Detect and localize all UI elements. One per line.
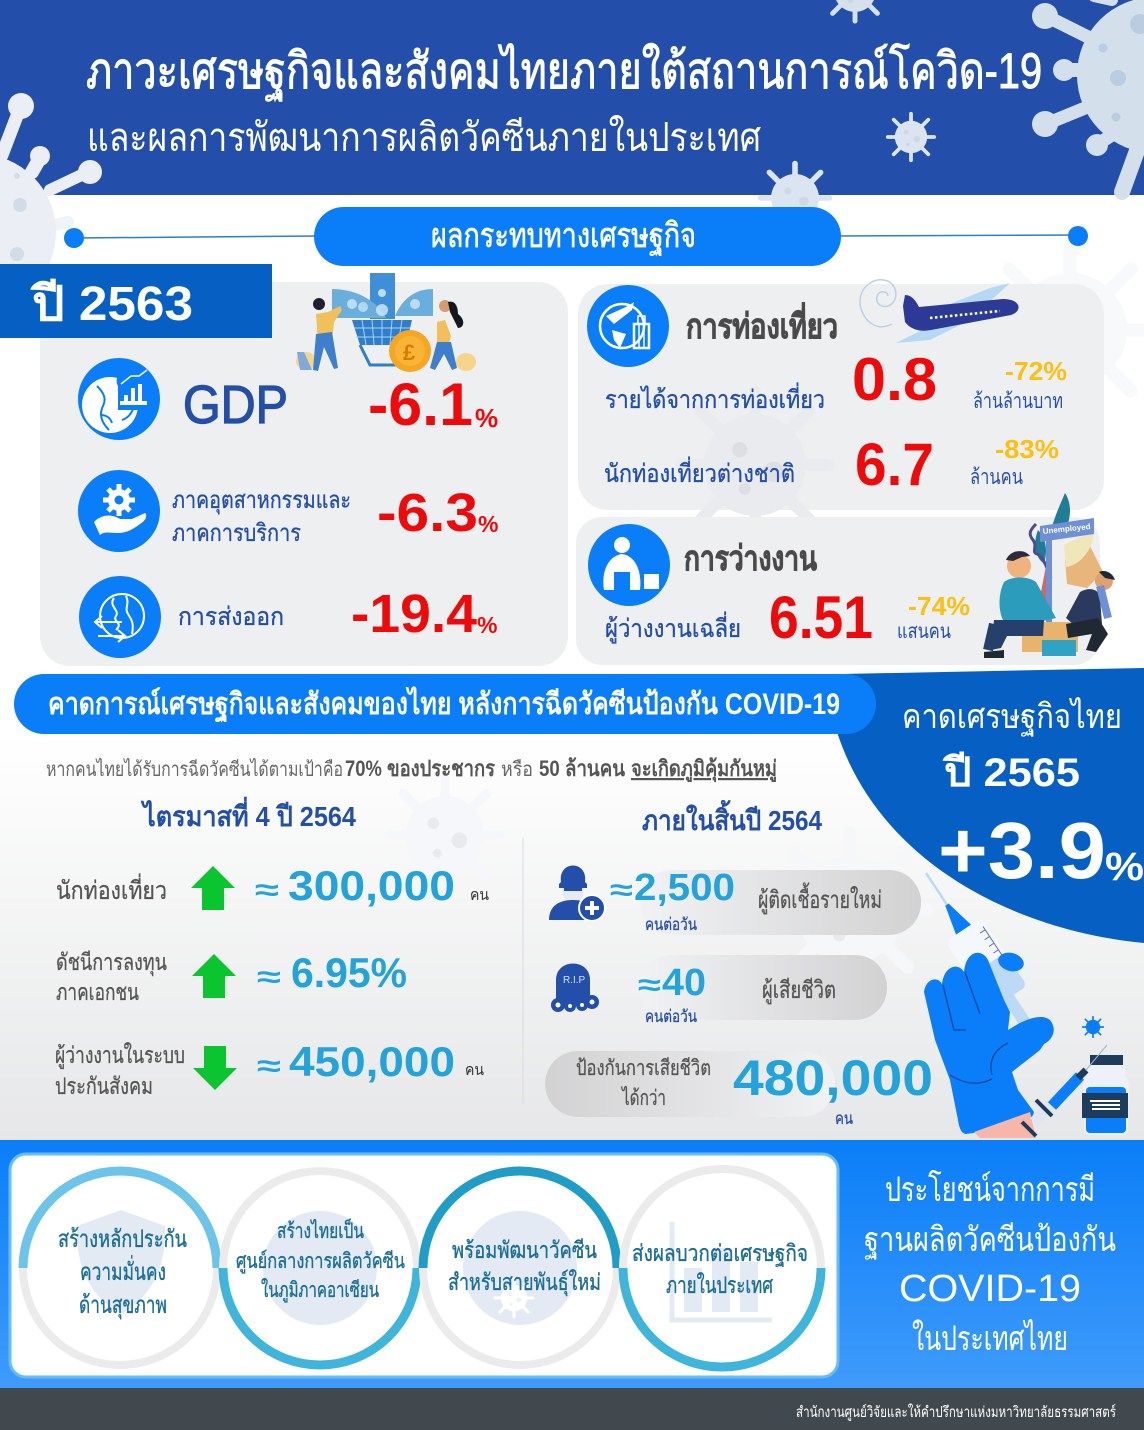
large virus right bbox=[1032, 0, 1144, 192]
syringe bbox=[908, 861, 1056, 1054]
forecast year: ปี 2565 bbox=[942, 751, 1080, 795]
tourism heading: การท่องเที่ยว bbox=[686, 302, 838, 346]
icon: unemployed person bbox=[588, 524, 670, 606]
income unit: ล้านล้านบาท bbox=[973, 390, 1063, 413]
industry percent: % bbox=[478, 511, 498, 537]
export percent: % bbox=[477, 612, 497, 638]
benefit ring 4: ภายในประเทศ bbox=[666, 1272, 773, 1298]
forecast blue corner bbox=[838, 668, 1144, 943]
forearm bbox=[974, 1112, 1036, 1138]
forecast value: +3.9 bbox=[938, 806, 1106, 895]
icon: shopping cart illustration bbox=[296, 273, 476, 372]
approximately sign: ≈ bbox=[255, 874, 279, 907]
benefit ring 4 bbox=[623, 1169, 821, 1367]
value: 450,000 bbox=[289, 1038, 455, 1085]
benefit ring 1 bbox=[23, 1171, 217, 1365]
industry label: ภาคการบริการ bbox=[172, 520, 301, 547]
tourism income label: รายได้จากการท่องเที่ยว bbox=[605, 382, 825, 414]
forecast percent: % bbox=[1105, 845, 1144, 889]
icon: GDP globe bbox=[78, 358, 160, 440]
benefits heading: ในประเทศไทย bbox=[912, 1319, 1068, 1358]
large virus left bbox=[0, 93, 102, 310]
year tag 2563 bbox=[0, 264, 272, 338]
GDP label: GDP bbox=[183, 375, 288, 435]
illustration: airplane bbox=[860, 280, 1019, 343]
intro sentence bbox=[46, 756, 777, 783]
metric: tourists: นักท่องเที่ยว bbox=[56, 873, 167, 905]
tourists unit: ล้านคน bbox=[970, 466, 1023, 489]
unemployment heading: การว่างงาน bbox=[684, 540, 817, 578]
GDP percent: % bbox=[475, 403, 498, 433]
unemployed value: 6.51 bbox=[769, 584, 873, 651]
illustration: two unemployed men bbox=[984, 493, 1115, 658]
panel: benefits band bbox=[0, 1140, 1144, 1388]
panel: GDP 2563 bbox=[40, 273, 568, 666]
metric: deaths bbox=[551, 955, 887, 1026]
column heading: end of 2564: ภายในสิ้นปี 2564 bbox=[642, 799, 822, 836]
intro sentence: หรือ bbox=[501, 759, 533, 781]
metric: deaths prevented bbox=[545, 1050, 933, 1128]
tourism income value: 0.8 bbox=[852, 346, 937, 413]
approximately sign: ≈ bbox=[257, 1050, 281, 1083]
foreign tourists label: นักท่องเที่ยวต่างชาติ bbox=[604, 456, 795, 488]
section heading: forecast after vaccination: คาดการณ์เศรษฐกิจและสังคมของไทย หลังการฉีดวัคซีนป้องกัน COVID-19 bbox=[48, 686, 840, 724]
benefit ring 2 bbox=[223, 1171, 417, 1365]
section heading: economic impact bbox=[64, 207, 1088, 266]
metric: deaths prevented: ได้กว่า bbox=[621, 1086, 666, 1110]
metric: insured unemployed: ผู้ว่างงานในระบบ bbox=[55, 1042, 185, 1069]
benefit ring 1: สร้างหลักประกัน bbox=[58, 1226, 187, 1253]
benefits heading bbox=[864, 1170, 1116, 1358]
metric: insured unemployed bbox=[55, 1038, 484, 1099]
year tag 2563: ปี 2563 bbox=[30, 278, 193, 331]
section heading: forecast after vaccination bbox=[14, 674, 876, 734]
rate: คนต่อวัน bbox=[645, 915, 697, 934]
section heading: economic impact: ผลกระทบทางเศรษฐกิจ bbox=[431, 217, 696, 256]
icon: export bbox=[79, 576, 161, 658]
unemployed unit: แสนคน bbox=[897, 621, 951, 643]
value: 6.95% bbox=[291, 949, 407, 996]
arrow up bbox=[191, 866, 235, 910]
unit: คน bbox=[835, 1109, 853, 1128]
benefit ring 4: ส่งผลบวกต่อเศรษฐกิจ bbox=[632, 1240, 808, 1267]
metric: insured unemployed: ประกันสังคม bbox=[55, 1073, 153, 1099]
value: 300,000 bbox=[288, 862, 455, 909]
metric: private investment: ดัชนีการลงทุน bbox=[56, 949, 167, 976]
benefit ring 2: ในภูมิภาคอาเซียน bbox=[261, 1278, 379, 1303]
benefit ring 3: พร้อมพัฒนาวัคซีน bbox=[452, 1237, 597, 1263]
metric: new infections bbox=[549, 866, 921, 935]
value: 480,000 bbox=[733, 1050, 933, 1106]
column heading: Q4 2564: ไตรมาสที่ 4 ปี 2564 bbox=[140, 796, 356, 832]
value: 2,500 bbox=[634, 867, 735, 909]
intro sentence: 70% ของประชากร bbox=[345, 756, 495, 781]
export label: การส่งออก bbox=[178, 603, 284, 631]
approximately sign: ≈ bbox=[610, 874, 633, 907]
tourists change: -83% bbox=[995, 434, 1059, 464]
metric: tourists bbox=[56, 862, 489, 910]
unemployed change: -74% bbox=[908, 591, 970, 621]
label: ป้องกันการเสียชีวิต bbox=[576, 1057, 711, 1080]
icon: sick person bbox=[549, 866, 605, 921]
approximately sign: ≈ bbox=[638, 969, 661, 1002]
panel: unemployment bbox=[576, 493, 1115, 665]
unit: คน bbox=[465, 1062, 484, 1079]
benefit ring 1: ความมั่นคง bbox=[80, 1255, 166, 1286]
benefit ring 2: สร้างไทยเป็น bbox=[277, 1217, 364, 1243]
label: ผู้เสียชีวิต bbox=[762, 977, 836, 1005]
subtitle: และผลการพัฒนาการผลิตวัคซีนภายในประเทศ bbox=[87, 114, 761, 160]
footer bbox=[0, 1388, 1144, 1430]
benefit ring 3 bbox=[423, 1171, 617, 1365]
virus decorations in header bbox=[761, 0, 1144, 232]
illustration: gloved hand with syringe bbox=[908, 861, 1056, 1138]
unemployed label: ผู้ว่างงานเฉลี่ย bbox=[605, 611, 741, 644]
metric: private investment: ภาคเอกชน bbox=[56, 979, 139, 1005]
glove bbox=[924, 953, 1054, 1134]
panel: tourism bbox=[578, 280, 1104, 538]
arrow down bbox=[193, 1046, 237, 1090]
value: 40 bbox=[662, 962, 706, 1004]
export value: -19.4 bbox=[351, 584, 477, 644]
metric: private investment bbox=[56, 949, 407, 1005]
illustration: vaccine bottle and small syringe bbox=[1022, 1017, 1129, 1136]
industry label bbox=[172, 487, 351, 547]
intro sentence: หากคนไทยได้รับการฉีดวัคซีนได้ตามเป้าคือ bbox=[46, 758, 343, 781]
label: ผู้ติดเชื้อรายใหม่ bbox=[758, 882, 882, 915]
benefit ring 3: สำหรับสายพันธุ์ใหม่ bbox=[448, 1269, 601, 1296]
rate: คนต่อวัน bbox=[645, 1007, 697, 1026]
industry label: ภาคอุตสาหกรรมและ bbox=[172, 487, 351, 515]
benefit ring 1: ด้านสุขภาพ bbox=[79, 1292, 167, 1320]
icon: shopping cart illustration: £ bbox=[403, 340, 416, 365]
arrow up bbox=[192, 954, 236, 998]
benefits white box bbox=[10, 1154, 838, 1377]
unit: คน bbox=[470, 887, 489, 904]
benefit ring 2: ศูนย์กลางการผลิตวัคซีน bbox=[236, 1249, 405, 1274]
foreign tourists value: 6.7 bbox=[855, 431, 934, 498]
intro sentence: จะเกิดภูมิคุ้มกันหมู่ bbox=[631, 756, 777, 783]
illustration: two unemployed men: Unemployed bbox=[1042, 522, 1091, 536]
icon: gravestone: R.I.P bbox=[563, 975, 586, 986]
header band bbox=[0, 0, 1144, 232]
industry value: -6.3 bbox=[377, 483, 478, 543]
benefits heading: COVID-19 bbox=[899, 1268, 1081, 1310]
GDP value: -6.1 bbox=[368, 371, 473, 438]
icon: gravestone bbox=[551, 964, 599, 1012]
approximately sign: ≈ bbox=[257, 961, 281, 994]
icon: tourism globe and suitcase bbox=[587, 285, 669, 367]
income change: -72% bbox=[1005, 356, 1067, 386]
intro sentence: 50 ล้านคน bbox=[539, 756, 625, 781]
icon: industry and service bbox=[78, 470, 160, 552]
